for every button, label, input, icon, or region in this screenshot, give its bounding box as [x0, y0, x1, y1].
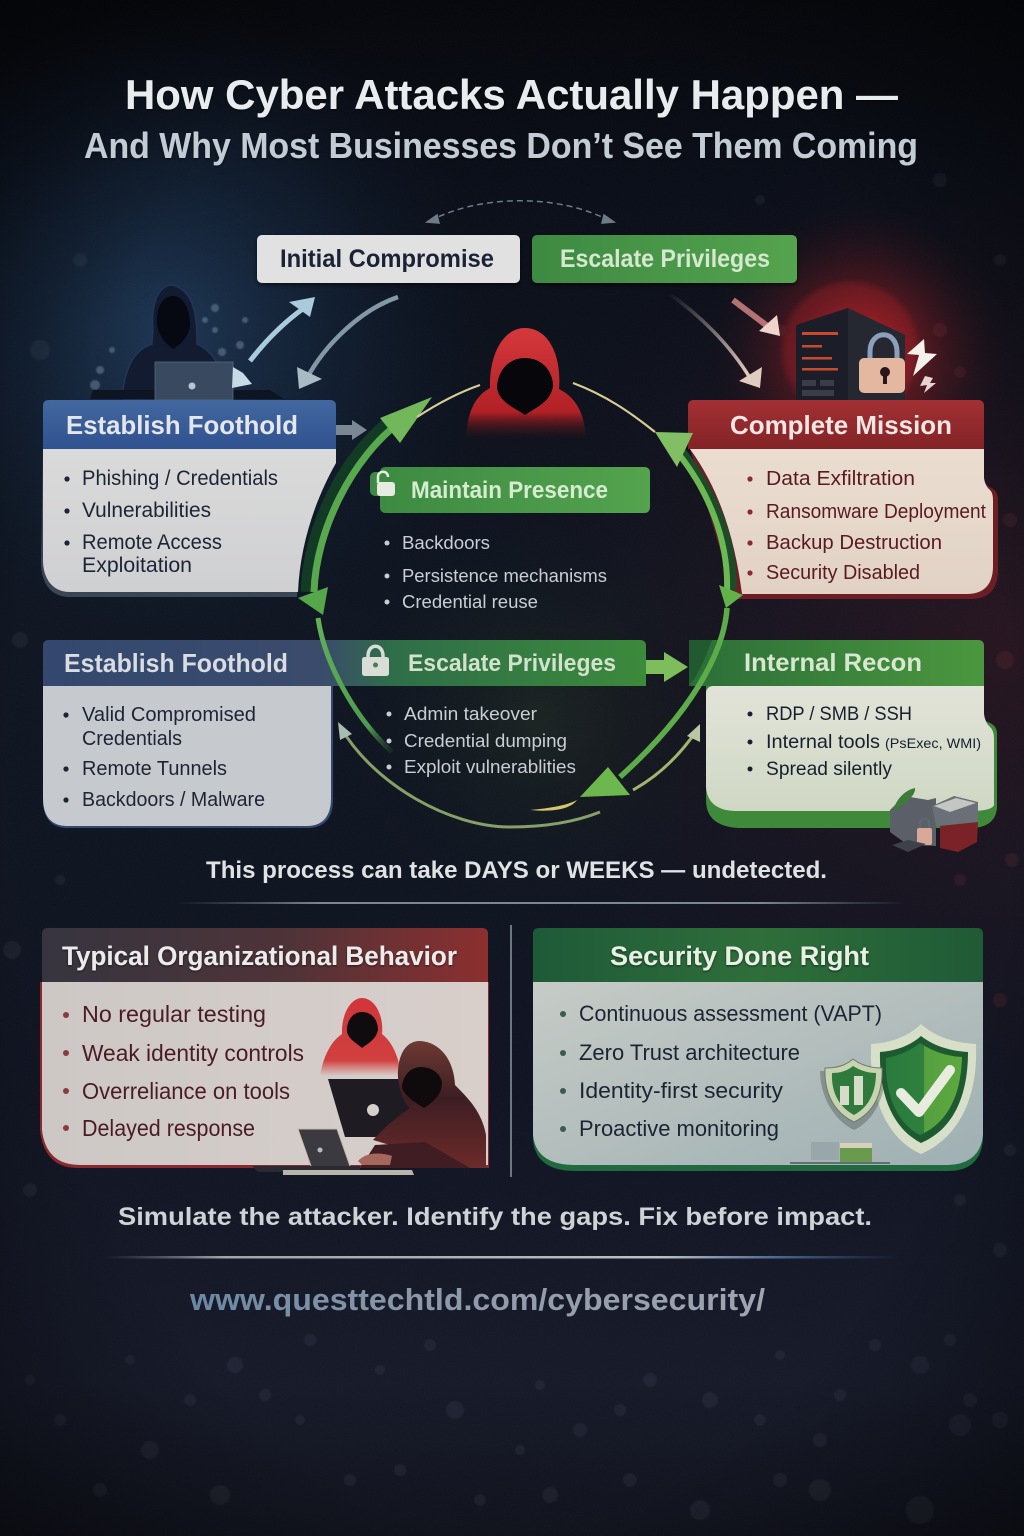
list [747, 468, 986, 584]
list [63, 704, 265, 811]
step: Initial Compromise [257, 235, 520, 283]
header [689, 640, 984, 686]
list [560, 1001, 882, 1141]
website link: www.questtechtld.com/cybersecurity/ [189, 1282, 765, 1317]
icon: small server and lock [890, 788, 978, 852]
list: RDP / SMB / SSH [766, 703, 912, 725]
icon: open lock [370, 472, 395, 496]
arrow: grey to centre [336, 420, 367, 440]
header band: Establish Foothold and Escalate Privileges: Establish Foothold [64, 648, 288, 678]
arrow: curved to Complete Mission [668, 293, 762, 388]
header [533, 928, 983, 982]
panel: Complete Mission: Complete Mission [730, 410, 952, 440]
list: Escalate Privileges: Credential dumping [404, 730, 567, 751]
icon: red hooded attacker [466, 328, 586, 440]
icon: red hooded figure [320, 998, 401, 1076]
header [43, 400, 336, 449]
arc: cream highlights [417, 383, 655, 432]
arrow: down from Initial Compromise [297, 297, 398, 389]
list: Spread silently [766, 758, 892, 780]
list: Data Exfiltration [766, 468, 915, 490]
list [748, 703, 981, 780]
arrow: up to Initial Compromise [232, 297, 315, 388]
list: Maintain Presence: Persistence mechanisms [402, 565, 607, 586]
list: Remote Access [82, 531, 222, 554]
icon: large shield with check [871, 1024, 976, 1154]
callout: timing: This process can take DAYS or WEEKS — undetected. [206, 857, 827, 884]
list: Valid Compromised [82, 704, 256, 726]
arrow: red to server [733, 300, 780, 336]
icon: hacker with laptops [252, 1041, 486, 1175]
list: Maintain Presence: Backdoors [402, 532, 490, 553]
list: Escalate Privileges: Admin takeover [404, 703, 537, 724]
step: Escalate Privileges top: Escalate Privileges [560, 245, 770, 273]
list: (PsExec, WMI) [885, 735, 981, 751]
list: Internal tools [766, 731, 880, 753]
tagline: Simulate the attacker. Identify the gaps. Fix before impact. [118, 1203, 872, 1231]
icon: small devices [790, 1142, 890, 1163]
panel: Security Done Right [533, 928, 983, 1171]
header band: Establish Foothold and Escalate Privileges: Escalate Privileges [408, 650, 616, 677]
arc: lower right [580, 608, 727, 797]
list: No regular testing [82, 1001, 266, 1027]
subtitle: And Why Most Businesses Don’t See Them Coming [84, 125, 918, 166]
list: Remote Tunnels [82, 758, 227, 780]
step: Escalate Privileges top [532, 235, 797, 283]
list: Maintain Presence: Credential reuse [402, 591, 538, 612]
list: Credentials [82, 728, 182, 750]
panel: Security Done Right: Security Done Right [610, 941, 869, 971]
panel: Establish Foothold lower [43, 686, 333, 828]
panel: Establish Foothold top [41, 400, 336, 597]
list [63, 1001, 304, 1141]
list: Backdoors / Malware [82, 789, 265, 811]
header band: Establish Foothold and Escalate Privileges [43, 640, 646, 686]
list: Backup Destruction [766, 532, 942, 554]
icon: blue hooded hacker at laptop [90, 285, 284, 400]
list: Proactive monitoring [579, 1116, 779, 1141]
list: Delayed response [82, 1115, 255, 1141]
step: Initial Compromise: Initial Compromise [280, 245, 494, 273]
arc: right top [655, 432, 743, 608]
list: Continuous assessment (VAPT) [579, 1001, 882, 1026]
dashed arc arrow [427, 201, 614, 223]
header [688, 400, 984, 449]
list: Ransomware Deployment [766, 501, 986, 523]
list: Vulnerabilities [82, 499, 211, 522]
title: How Cyber Attacks Actually Happen — [125, 71, 898, 118]
list: Security Disabled [766, 562, 920, 584]
list: Escalate Privileges: Exploit vulnerablities [404, 756, 576, 777]
panel: Complete Mission [688, 400, 998, 599]
list: Weak identity controls [82, 1040, 304, 1066]
list: Phishing / Credentials [82, 467, 278, 490]
list: Maintain Presence [384, 532, 607, 612]
arc: thin olive return [338, 722, 700, 827]
panel: Typical Organizational Behavior [40, 928, 489, 1175]
icon: server with padlock [782, 282, 937, 418]
panel: Typical Organizational Behavior: Typical Organizational Behavior [62, 941, 457, 971]
arc: left top [298, 397, 432, 615]
list: Zero Trust architecture [579, 1040, 800, 1065]
list: Exploitation [82, 554, 192, 577]
list [64, 467, 278, 577]
panel: Establish Foothold top: Establish Foothold [66, 410, 298, 440]
panel: Internal Recon [689, 640, 997, 852]
icon: lock [362, 646, 389, 676]
block: Maintain Presence [370, 467, 650, 513]
arc: lower left [318, 618, 392, 752]
list: Escalate Privileges [386, 703, 576, 777]
panel: Internal Recon: Internal Recon [744, 649, 922, 677]
block: Maintain Presence: Maintain Presence [411, 477, 608, 504]
header [42, 928, 488, 982]
title [84, 71, 918, 166]
cycle: circular green arrows [298, 383, 743, 827]
icon: small shield with bars [820, 1059, 885, 1130]
arrow: Escalate to Internal Recon [646, 652, 688, 682]
list: Identity-first security [579, 1078, 784, 1103]
list: Overreliance on tools [82, 1078, 290, 1104]
